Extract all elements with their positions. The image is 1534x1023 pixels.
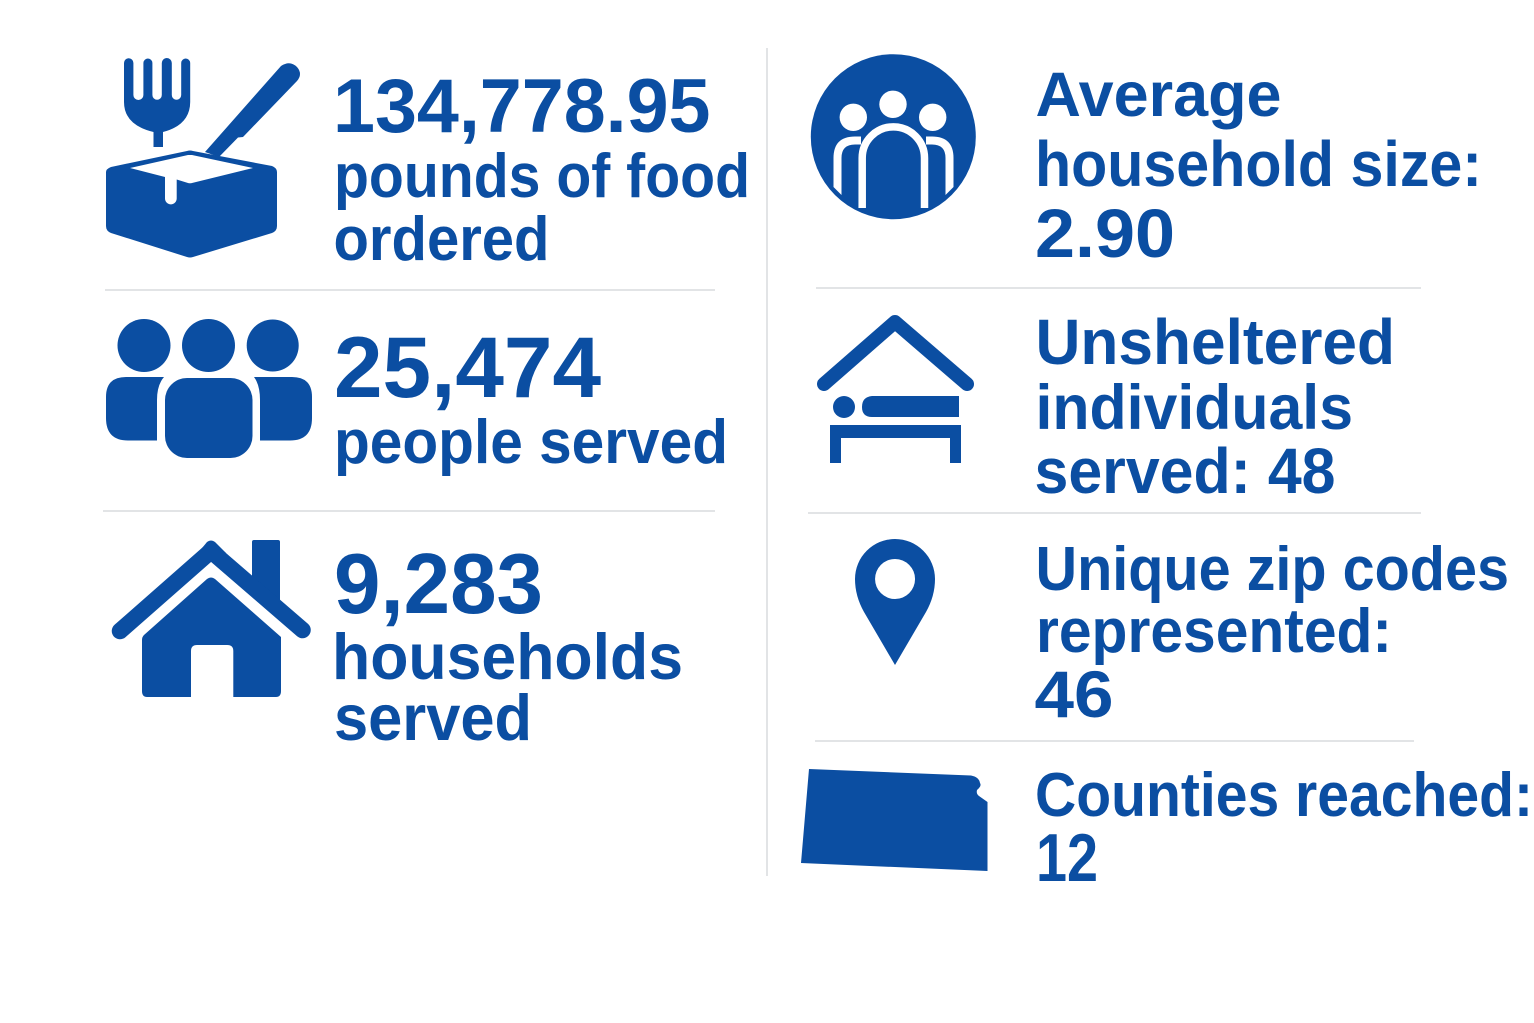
icon: food box with fork and knife [106,58,300,258]
stat: unsheltered individuals: individuals [1036,373,1353,443]
stat: average household size: 2.90 [1035,195,1175,272]
stat: unique zip codes: Unique zip codes [1036,535,1509,604]
stat: average household size [1035,60,1482,272]
icon: map pin [855,539,935,665]
stat: households served: households [332,620,683,693]
stat: unsheltered individuals: served: 48 [1034,435,1336,507]
stat: households served [332,537,683,754]
icon: roof and bed [824,322,967,463]
stat: unique zip codes [1034,535,1509,731]
stat: average household size: Average [1036,60,1282,130]
stat: people served: 25,474 [334,320,601,416]
stat: pounds of food ordered [333,64,750,274]
stat: unsheltered individuals: Unsheltered [1036,306,1395,378]
icon: group of people [106,319,312,458]
stat: households served: served [334,681,532,754]
stat: people served: people served [334,408,728,477]
icon: family in circle [811,54,976,219]
stat: households served: 9,283 [334,537,543,632]
stat: pounds of food ordered: pounds of food [334,142,750,211]
stat: counties reached: 12 [1036,820,1098,896]
icon: Kansas state shape [801,769,988,871]
stat: unique zip codes: represented: [1036,597,1392,666]
stat: pounds of food ordered: 134,778.95 [333,64,710,149]
icon: house [120,540,302,697]
stat: unique zip codes: 46 [1034,657,1114,731]
stat: pounds of food ordered: ordered [334,205,550,274]
stat: unsheltered individuals [1034,306,1395,507]
stat: people served [334,320,728,477]
stat: counties reached [1035,761,1533,896]
stat: average household size: household size: [1035,128,1482,200]
